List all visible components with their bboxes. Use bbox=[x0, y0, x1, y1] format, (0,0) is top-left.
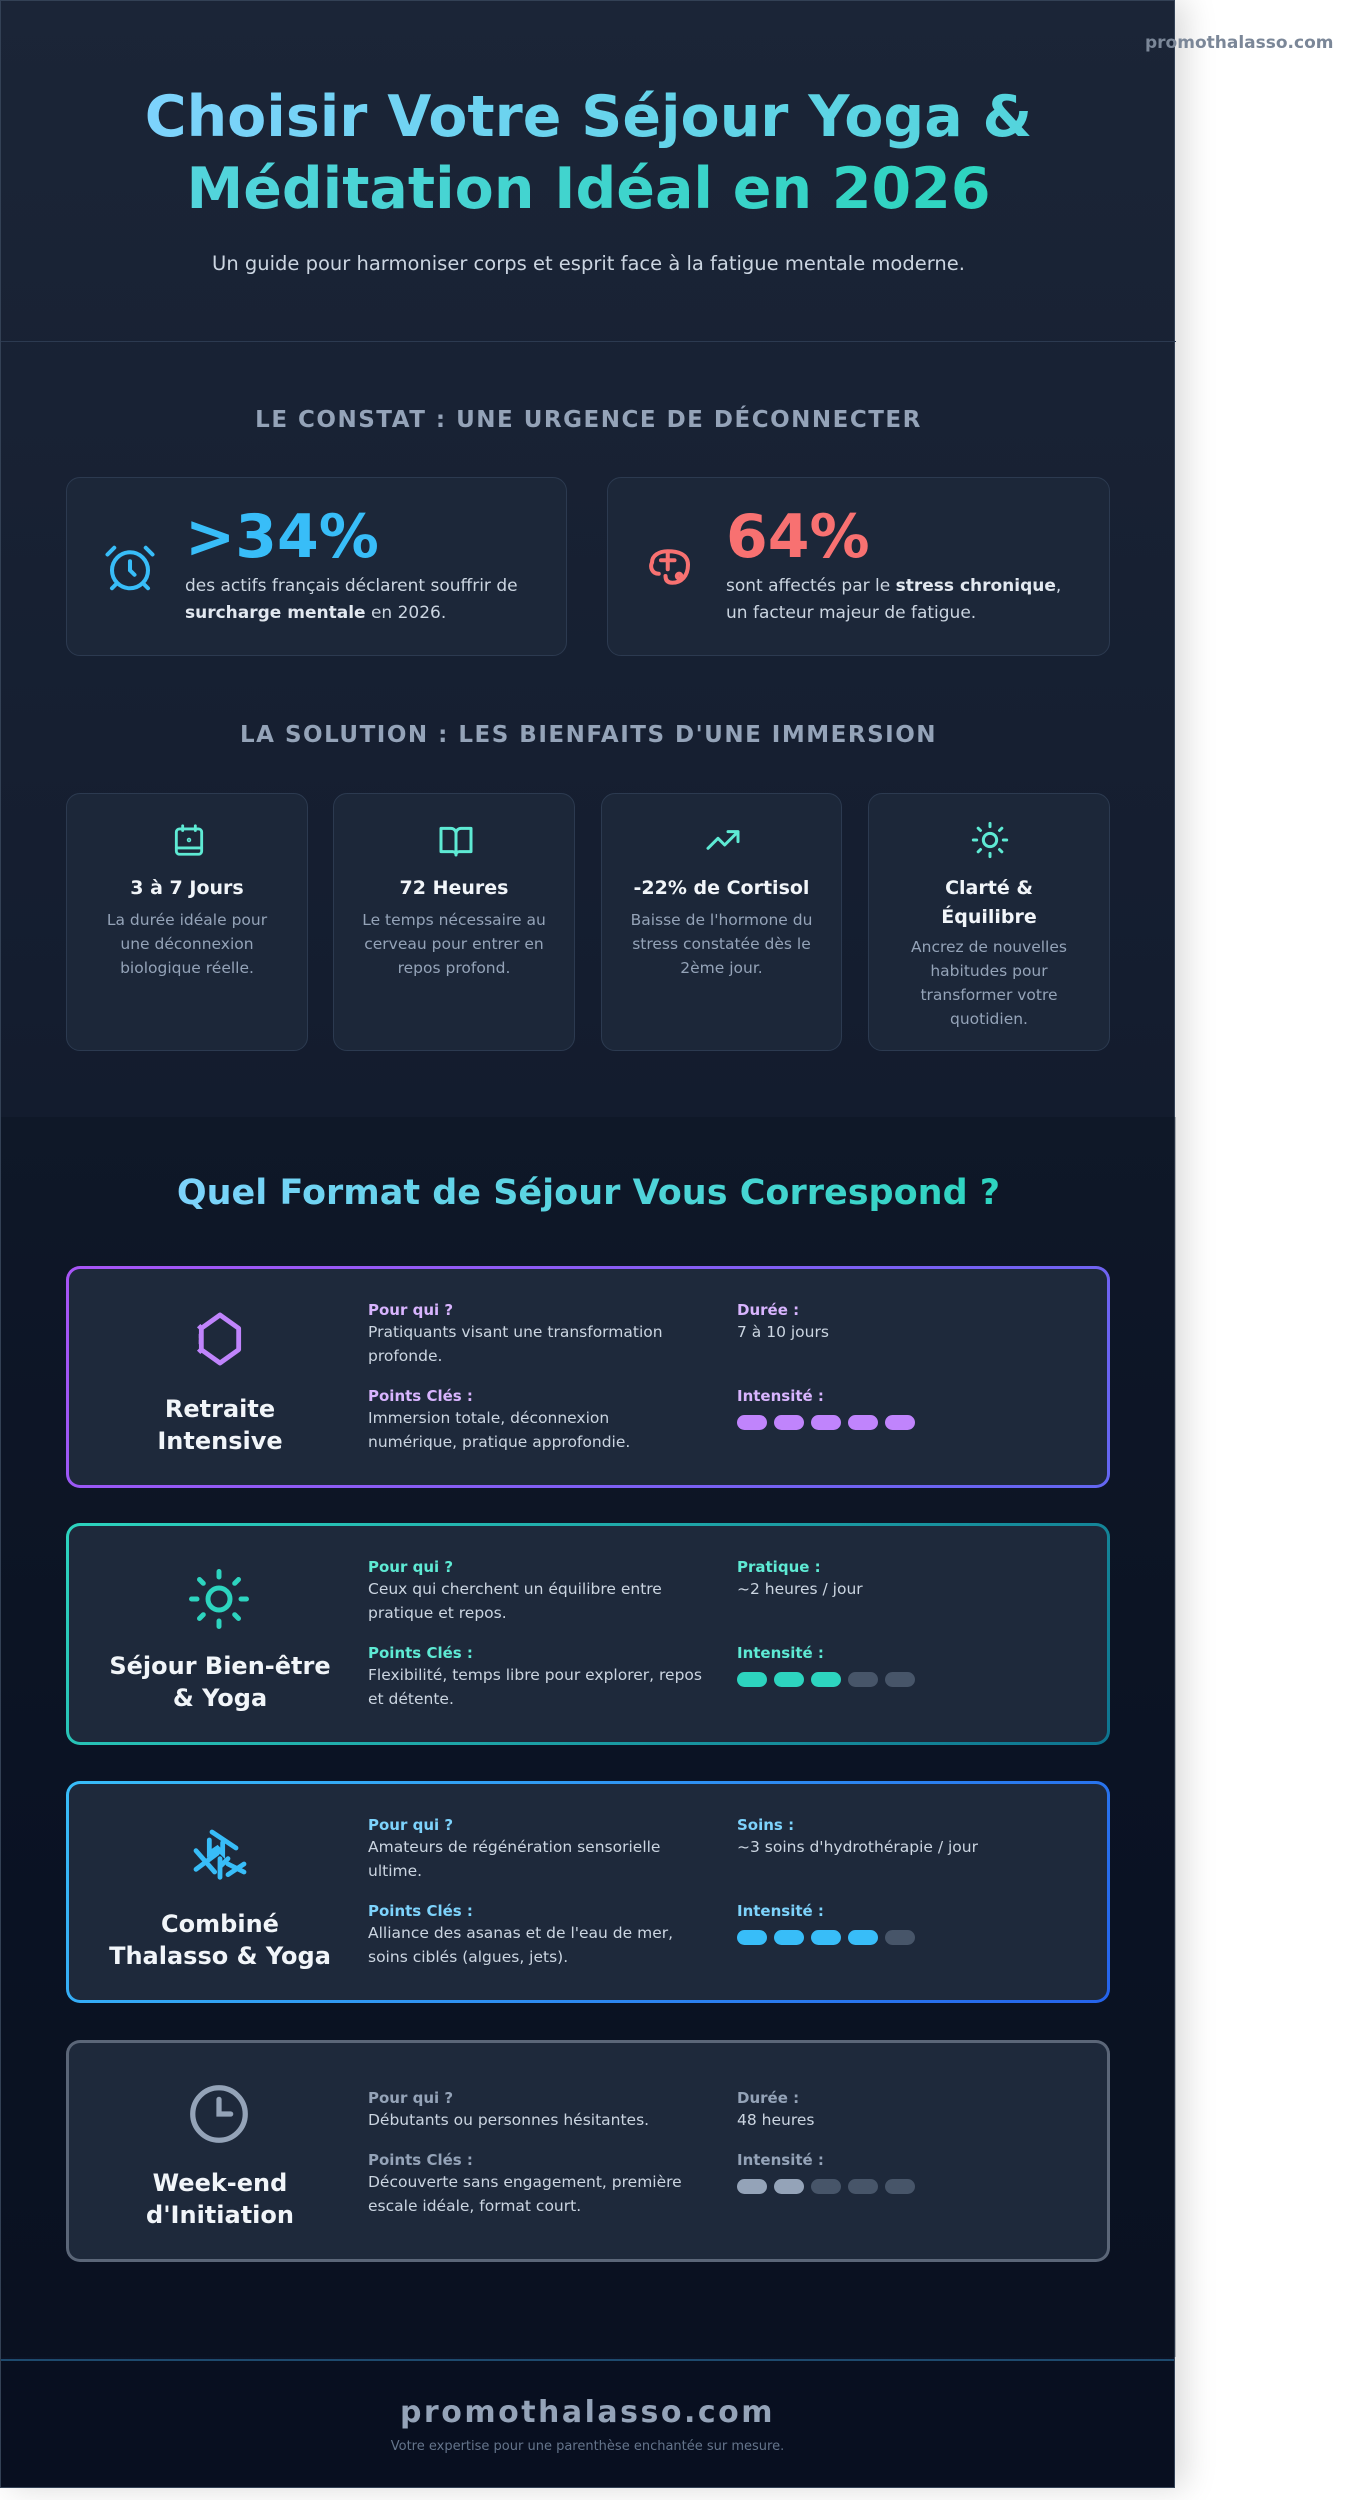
card: bien-etre: Pratique : bbox=[737, 1558, 821, 1576]
card: thalasso: Points Clés : bbox=[368, 1902, 473, 1920]
icon: trend bbox=[706, 830, 740, 850]
card: thalasso: Pour qui ? bbox=[368, 1816, 453, 1834]
icon: house bbox=[197, 1312, 242, 1366]
icon: clock bbox=[190, 2085, 248, 2143]
footer brand: promothalasso.com bbox=[400, 2395, 775, 2430]
card: retraite intensive: Pour qui ? bbox=[368, 1301, 453, 1319]
card: thalasso: ~3 soins d'hydrothérapie / jour bbox=[737, 1838, 978, 1856]
card: thalasso: Intensité : bbox=[737, 1902, 824, 1920]
benefit 2: 72 Heures bbox=[400, 877, 508, 899]
card: bien-etre: Séjour Bien-être bbox=[109, 1652, 331, 1680]
card: bien-etre: Pour qui ? bbox=[368, 1558, 453, 1576]
intensity dots bbox=[737, 1672, 915, 1687]
benefit 3: -22% de Cortisol bbox=[634, 877, 809, 899]
stat text: un facteur majeur de fatigue. bbox=[726, 603, 976, 623]
icon: sun bbox=[189, 1569, 249, 1629]
card: thalasso: Soins : bbox=[737, 1816, 794, 1834]
stat text: des actifs français déclarent souffrir de bbox=[185, 576, 518, 596]
intensity dots bbox=[737, 1930, 915, 1945]
card: retraite intensive: Points Clés : bbox=[368, 1387, 473, 1405]
card: bien-etre: & Yoga bbox=[173, 1684, 267, 1712]
card: thalasso: Amateurs de régénération sensorielle ultime. bbox=[368, 1838, 660, 1880]
card: retraite intensive: Intensité : bbox=[737, 1387, 824, 1405]
footer tagline: Votre expertise pour une parenthèse enchantée sur mesure. bbox=[391, 2439, 784, 2454]
icon: brain bbox=[649, 549, 690, 585]
card: week-end bbox=[66, 2040, 1110, 2262]
benefit 2 bbox=[333, 793, 575, 1051]
card: retraite intensive: Intensive bbox=[157, 1427, 283, 1455]
watermark: promothalasso.com bbox=[1145, 33, 1333, 53]
card: bien-etre: ~2 heures / jour bbox=[737, 1580, 863, 1598]
stat text bbox=[726, 576, 1061, 623]
icon: alarm clock bbox=[105, 546, 155, 590]
title bbox=[145, 84, 1032, 222]
benefit 4 bbox=[868, 793, 1110, 1051]
card: week-end: Durée : bbox=[737, 2089, 799, 2107]
stat text bbox=[185, 576, 518, 623]
stat card 1 bbox=[66, 477, 567, 656]
card: thalasso bbox=[66, 1781, 1110, 2003]
card: thalasso: Alliance des asanas et de l'eau de mer, soins ciblés (algues, jets). bbox=[368, 1924, 673, 1966]
card: bien-etre: Points Clés : bbox=[368, 1644, 473, 1662]
stat value: 64% bbox=[726, 502, 870, 572]
card: retraite intensive bbox=[66, 1266, 1110, 1488]
benefit 1: 3 à 7 Jours bbox=[130, 877, 244, 899]
card: retraite intensive: Immersion totale, déconnexion numérique, pratique approfondie. bbox=[368, 1409, 630, 1451]
card: week-end: Débutants ou personnes hésitantes. bbox=[368, 2111, 649, 2129]
stat card 2 bbox=[607, 477, 1110, 656]
card: thalasso: Thalasso & Yoga bbox=[109, 1942, 331, 1970]
subtitle: Un guide pour harmoniser corps et esprit face à la fatigue mentale moderne. bbox=[212, 252, 965, 275]
heading: constat: LE CONSTAT : UNE URGENCE DE DÉCONNECTER bbox=[255, 407, 922, 433]
benefit 2: Le temps nécessaire au cerveau pour entrer en repos profond. bbox=[362, 911, 546, 977]
intensity dots bbox=[737, 1415, 915, 1430]
stat value: >34% bbox=[185, 502, 379, 572]
benefit 3: Baisse de l'hormone du stress constatée dès le 2ème jour. bbox=[631, 911, 812, 977]
card: week-end: Points Clés : bbox=[368, 2151, 473, 2169]
card: bien-etre bbox=[66, 1523, 1110, 1745]
card: week-end: Pour qui ? bbox=[368, 2089, 453, 2107]
card: retraite intensive: 7 à 10 jours bbox=[737, 1323, 829, 1341]
benefit 1: La durée idéale pour une déconnexion biologique réelle. bbox=[107, 911, 267, 977]
benefit 4: Ancrez de nouvelles habitudes pour transformer votre quotidien. bbox=[911, 938, 1067, 1028]
card: bien-etre: Flexibilité, temps libre pour explorer, repos et détente. bbox=[368, 1666, 702, 1708]
title: Choisir Votre Séjour Yoga & bbox=[145, 84, 1032, 150]
card: retraite intensive: Pratiquants visant une transformation profonde. bbox=[368, 1323, 663, 1365]
card: week-end: d'Initiation bbox=[146, 2201, 294, 2229]
footer bbox=[1, 2359, 1174, 2487]
icon: calendar bbox=[174, 824, 204, 856]
icon: waves bbox=[194, 1830, 246, 1880]
card: bien-etre: Ceux qui cherchent un équilibre entre pratique et repos. bbox=[368, 1580, 662, 1622]
card: week-end: Week-end bbox=[153, 2169, 287, 2197]
card: week-end: Découverte sans engagement, première escale idéale, format court. bbox=[368, 2173, 682, 2215]
stat text: sont affectés par le stress chronique, bbox=[726, 576, 1061, 596]
benefit 1 bbox=[66, 793, 308, 1051]
icon: sun bbox=[972, 822, 1008, 858]
card: week-end: Intensité : bbox=[737, 2151, 824, 2169]
card: thalasso: Combiné bbox=[161, 1910, 279, 1938]
heading: formats: Quel Format de Séjour Vous Correspond ? bbox=[177, 1173, 1000, 1213]
benefit 3 bbox=[601, 793, 842, 1051]
icon: book bbox=[440, 826, 472, 856]
benefit 4: Clarté & bbox=[945, 877, 1033, 899]
stat text: surcharge mentale en 2026. bbox=[185, 603, 446, 623]
card: retraite intensive: Retraite bbox=[165, 1395, 275, 1423]
card: retraite intensive: Durée : bbox=[737, 1301, 799, 1319]
title: Méditation Idéal en 2026 bbox=[186, 156, 991, 222]
heading: solution: LA SOLUTION : LES BIENFAITS D'UNE IMMERSION bbox=[240, 722, 937, 748]
card: week-end: 48 heures bbox=[737, 2111, 814, 2129]
benefit 4: Équilibre bbox=[941, 906, 1037, 928]
intensity dots bbox=[737, 2179, 915, 2194]
card: bien-etre: Intensité : bbox=[737, 1644, 824, 1662]
